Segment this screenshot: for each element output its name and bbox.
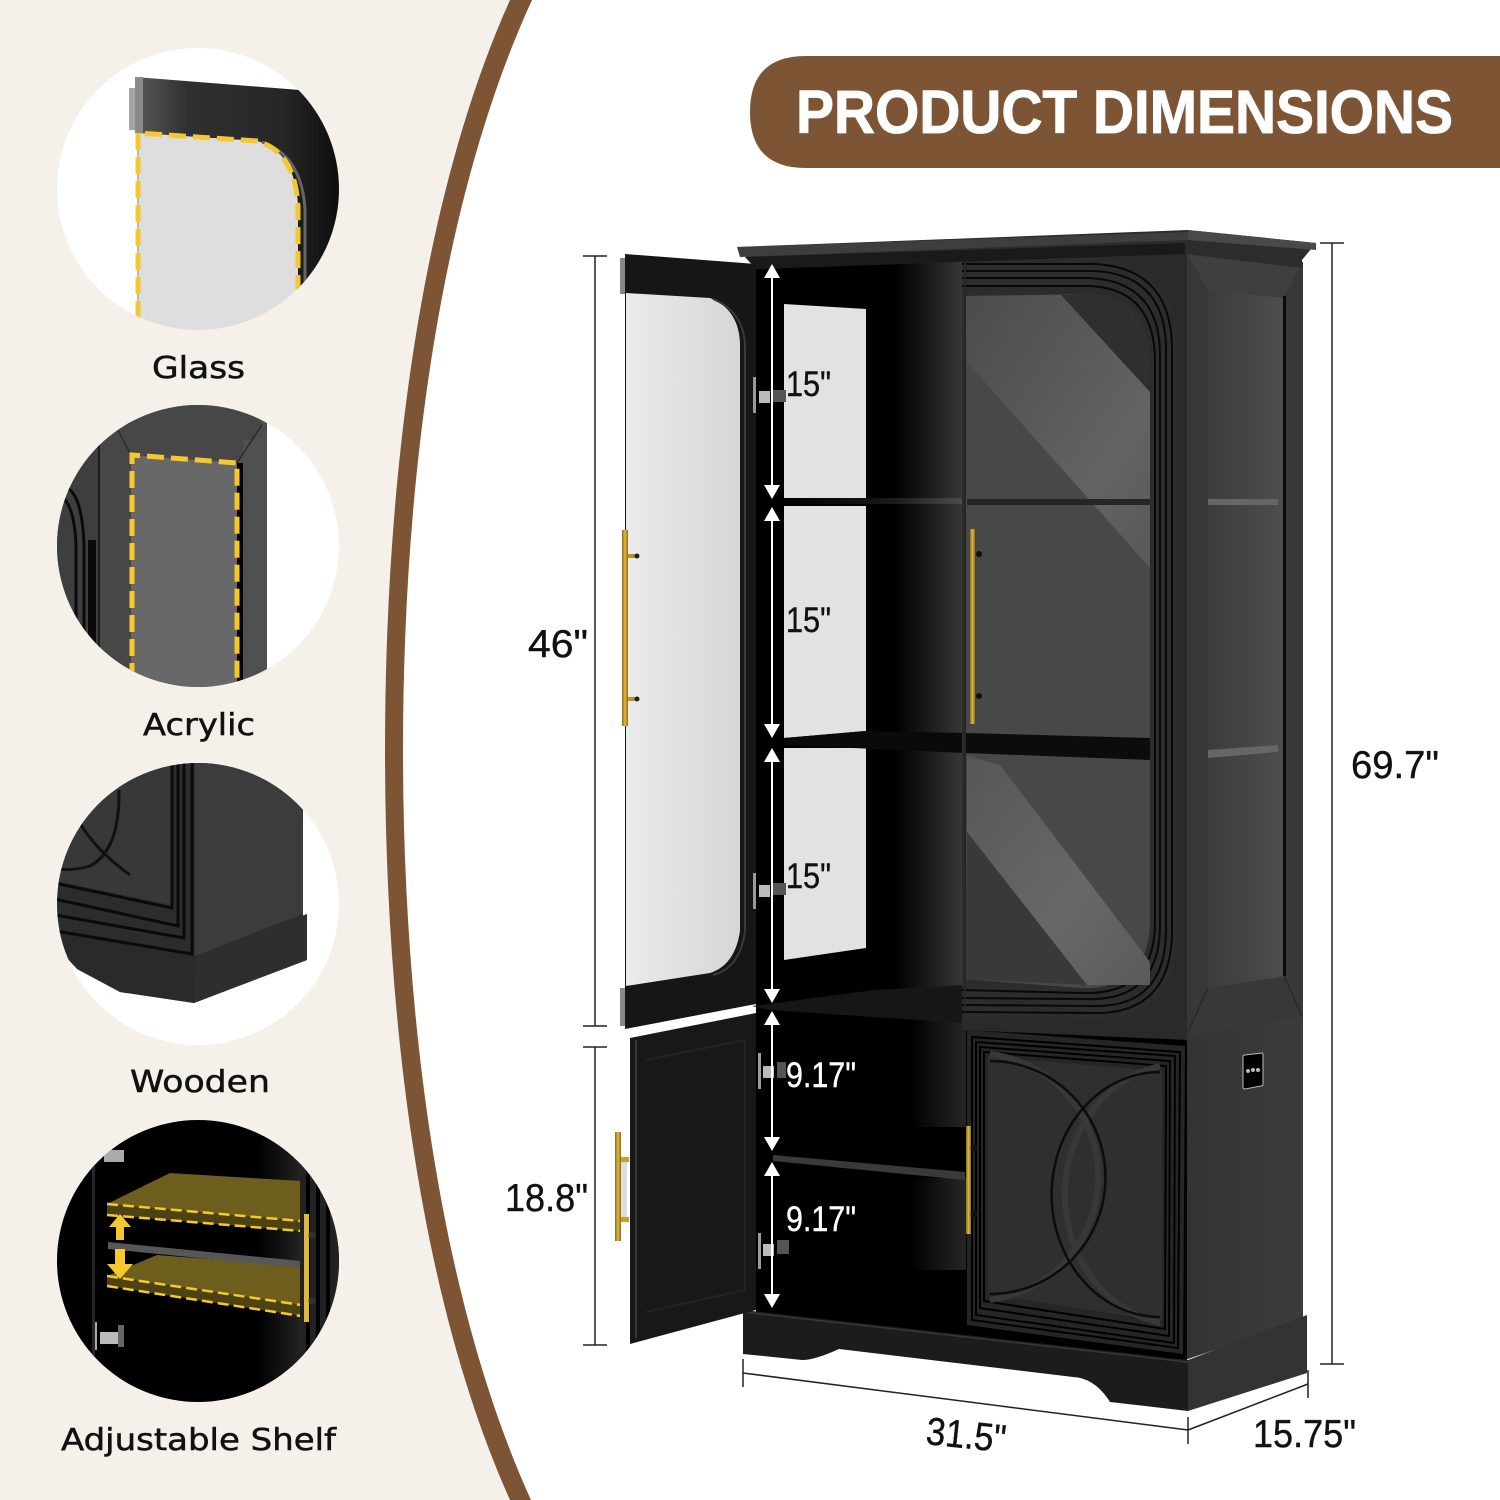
- open door handle: [622, 530, 640, 726]
- open lower door: [630, 1013, 756, 1344]
- label: glass: Glass: [152, 351, 245, 386]
- shelf height labels: 15": [786, 365, 831, 404]
- label: acrylic: Acrylic: [143, 708, 255, 743]
- cabinet right side: [1185, 250, 1303, 1360]
- shelf height labels: 9.17": [786, 1056, 856, 1095]
- right door column frame: [962, 250, 1187, 1040]
- white interior arrows: [764, 264, 780, 1308]
- panel: adjustable shelf detail: [57, 1120, 345, 1402]
- right glass door: [962, 258, 1178, 1019]
- dimension: upper height 46: [528, 256, 607, 1026]
- shelf height labels: 9.17": [786, 1200, 856, 1239]
- title banner: [750, 56, 1500, 168]
- dimension: width 31.5: 31.5": [924, 1410, 1008, 1461]
- dimension: depth 15.75: [1188, 1370, 1356, 1456]
- dimension: total height 69.7: 69.7": [1351, 744, 1439, 787]
- dimension: total height 69.7: [1320, 243, 1439, 1364]
- lower shelf: [773, 1155, 965, 1180]
- brown curved divider: [385, 0, 532, 1500]
- open glass door: [620, 254, 756, 1029]
- panel: glass detail: [57, 48, 345, 345]
- lower door handle: [966, 1126, 978, 1234]
- dimension: lower height 18.8: [505, 1047, 607, 1345]
- shelf height labels: 15": [786, 601, 831, 640]
- base plinth: [743, 1310, 1307, 1411]
- panel: acrylic detail: [50, 400, 339, 700]
- dimension: lower height 18.8: 18.8": [505, 1177, 588, 1220]
- title banner: PRODUCT DIMENSIONS: [796, 77, 1453, 146]
- cornice: [737, 230, 1316, 269]
- lower open door handle: [615, 1132, 629, 1241]
- upper shelves: [752, 498, 968, 1023]
- dimension: upper height 46: 46": [528, 623, 588, 666]
- back openings: [784, 304, 866, 960]
- label: wooden: Wooden: [130, 1065, 270, 1100]
- panel: wooden detail: [50, 760, 339, 1045]
- dimension: width 31.5: [743, 1359, 1188, 1461]
- side glass panel: [1187, 252, 1302, 1036]
- cabinet illustration: [615, 230, 1316, 1411]
- label: adjustable shelf: Adjustable Shelf: [61, 1423, 338, 1458]
- dimension: depth 15.75: 15.75": [1253, 1413, 1356, 1456]
- shelf height labels: [786, 365, 856, 1239]
- cabinet interior: [756, 250, 1187, 1360]
- hinges: [753, 377, 789, 1269]
- right door handle: [970, 529, 982, 724]
- shelf height labels: 15": [786, 857, 831, 896]
- lower right door: [967, 1030, 1185, 1354]
- left cream panel: [0, 0, 510, 1500]
- power outlet: [1243, 1053, 1263, 1089]
